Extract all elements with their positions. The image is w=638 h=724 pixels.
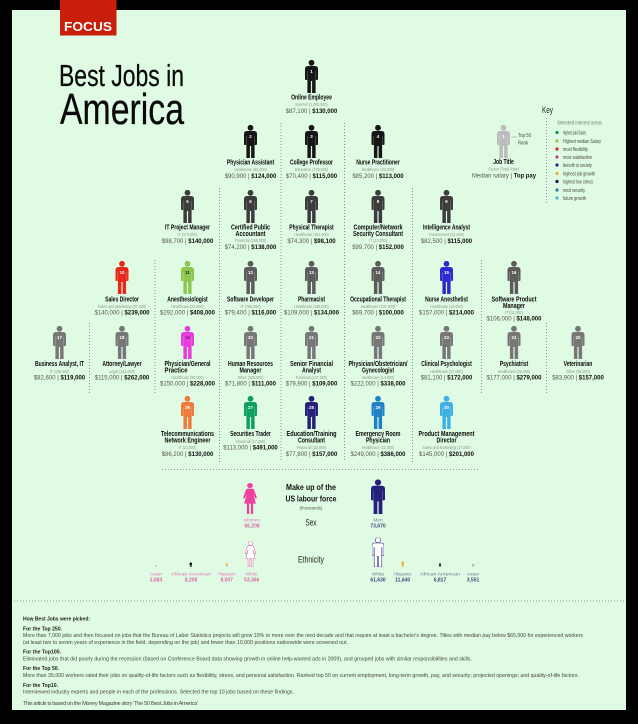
job: Nurse Practitioner xyxy=(352,125,404,180)
job: Securities Trader: 27 xyxy=(248,405,253,410)
job: Occupational Therapist xyxy=(350,261,406,316)
sector: Education (276,000) xyxy=(295,167,329,172)
section tab: FOCUS xyxy=(60,0,116,36)
job: Pharmacist: 13 xyxy=(309,270,314,275)
top 250: More than 7,000 jobs and then focused on jobs that the Bureau of Labor Statistics projects will grow 10% or more over the next decade and that require at least a bachelor's degree. Titles with median pay below $65,000 for experienced workers xyxy=(23,633,583,639)
white women xyxy=(244,541,260,584)
job: Sales Director xyxy=(95,261,150,316)
african american men: African American xyxy=(420,572,460,578)
job title: Securities Trader xyxy=(230,430,271,438)
sector: Healthcare (19,000) xyxy=(430,304,463,309)
key item 1: Highest paid Salary xyxy=(563,130,586,136)
job title: Human Resources xyxy=(228,361,273,368)
job title: Telecommunications xyxy=(161,431,214,438)
salary: $99,700 | $152,000 xyxy=(352,245,404,251)
sector: Other (68,000) xyxy=(566,369,590,374)
sample sector: Sector (Total Jobs) xyxy=(488,166,519,172)
job title: Product Management xyxy=(418,431,475,438)
icon: person rank 4 xyxy=(372,125,384,158)
key item 3: most flexibility xyxy=(563,147,588,153)
sector: IT (13,000) xyxy=(369,238,387,243)
job title: Sales Director xyxy=(105,296,139,304)
job title: Attorney/Lawyer xyxy=(102,360,142,368)
hispanic women: Hispanic xyxy=(217,572,236,578)
sector: Healthcare (22,000) xyxy=(362,445,395,450)
sector: IT (798,000) xyxy=(241,304,261,309)
sector: Healthcare (161,000) xyxy=(294,232,329,237)
icon: person rank 5 xyxy=(181,190,194,223)
salary: $113,000 | $491,000 xyxy=(223,446,278,452)
job title: Software Developer xyxy=(227,296,274,304)
sector: Sales and Marketing (97,000) xyxy=(98,304,147,309)
job title: Consultant xyxy=(298,438,325,444)
job: Attorney/Lawyer: 18 xyxy=(120,335,125,340)
job: Anesthesiologist: 11 xyxy=(185,270,190,275)
job: Telecommunications Network Engineer: 26 xyxy=(185,405,190,410)
women figure xyxy=(243,483,261,530)
job: Software Product Manager: 16 xyxy=(512,270,517,275)
legend: sample job entry: 1 xyxy=(502,134,505,139)
rank label: Rank xyxy=(518,140,528,146)
job: Product Management Director: 30 xyxy=(444,405,449,410)
source note: This article is based on the Money Magazine story 'The 50 Best Jobs in America' xyxy=(23,701,198,707)
hispanic men: Hispanic xyxy=(393,572,412,578)
salary: $86,200 | $130,000 xyxy=(162,452,214,458)
salary: $70,400 | $115,000 xyxy=(286,174,338,180)
job title: Emergency Room xyxy=(356,431,400,438)
sector: Healthcare (90,000) xyxy=(171,375,204,380)
job: Intelligence Analyst: 9 xyxy=(445,199,448,204)
top 100: Eliminated jobs that did poorly during the recession (based on Conference Board data showing growth in online help-wanted ads in 2009), and grouped jobs with similar responsibilities and skills. xyxy=(23,656,472,662)
job title: Computer/Network xyxy=(354,224,403,231)
job title: Anesthesiologist xyxy=(167,296,208,304)
icon: person rank 22 xyxy=(372,326,384,359)
labour force heading: US labour force xyxy=(286,494,337,504)
job title: Online Employee xyxy=(291,94,332,102)
top 250: (at least two to seven years of experience in the field, depending on the job) and fewer than 10,000 positions nationwide were screened out. xyxy=(23,640,348,646)
salary: $81,100 | $172,000 xyxy=(421,376,473,382)
icon: man xyxy=(371,479,385,514)
icon: person rank 29 xyxy=(372,396,384,429)
asian women xyxy=(150,565,162,584)
key xyxy=(542,105,602,202)
salary: $79,400 | $116,000 xyxy=(225,310,277,316)
job: Pharmacist xyxy=(284,261,340,316)
hispanic women: 8,007 xyxy=(220,578,233,584)
african american women: African American xyxy=(171,572,211,578)
job title: Physician xyxy=(366,438,390,444)
job title: Analyst xyxy=(302,368,321,374)
job: College Professor xyxy=(286,125,338,180)
african american men xyxy=(420,563,460,584)
asian men xyxy=(467,564,479,584)
job: Nurse Practitioner: 4 xyxy=(377,134,380,139)
icon: person rank 11 xyxy=(181,261,194,294)
job: Certified Public Accountant: 6 xyxy=(249,199,252,204)
sector: Internet (1,000,000) xyxy=(295,101,328,107)
asian women: 3,084 xyxy=(150,578,162,584)
job title: Physical Therapist xyxy=(289,224,334,232)
sector: Legal (141,000) xyxy=(109,369,135,374)
title: Best Jobs in xyxy=(59,58,184,93)
labour force heading: (thousands) xyxy=(300,506,323,512)
sector: IT (31,000) xyxy=(505,310,523,315)
salary: $115,000 | $262,000 xyxy=(95,376,150,382)
top 50: More than 35,000 workers rated their jobs on quality-of-life factors such as flexibility, stress, and personal satisfaction. Ranked top 50 on current employment, long-term growth, pay, and security; projected openings; and quality-of-life factors. xyxy=(23,673,579,679)
job: Nurse Anesthetist xyxy=(419,261,475,316)
icon: person rank 28 xyxy=(305,396,318,429)
job title: Manager xyxy=(503,303,525,310)
job: IT Project Manager xyxy=(162,190,214,245)
job: Senior Financial Analyst xyxy=(286,326,338,388)
job title: Certified Public xyxy=(231,224,270,231)
job title: Physician/Obstetrician/ xyxy=(348,361,408,368)
salary: $87,100 | $130,000 xyxy=(286,109,338,115)
men figure xyxy=(370,479,386,530)
icon: person rank 1 xyxy=(305,60,318,93)
job: Psychiatrist: 24 xyxy=(512,335,517,340)
job: Human Resources Manager: 20 xyxy=(248,335,253,340)
icon: person rank 25 xyxy=(572,326,584,359)
job: Physical Therapist xyxy=(287,190,336,245)
sector: Healthcare (23,000) xyxy=(171,304,204,309)
salary: $249,000 | $386,000 xyxy=(351,452,406,458)
job: Emergency Room Physician: 29 xyxy=(376,405,381,410)
sex label: Sex xyxy=(306,518,317,528)
job: Clinical Psychologist xyxy=(421,326,473,382)
labour force heading: Make up of the xyxy=(286,482,336,492)
job title: Psychiatrist xyxy=(500,360,528,368)
icon: person rank 9 xyxy=(440,190,453,223)
job: Clinical Psychologist: 23 xyxy=(444,335,449,340)
icon: person rank 2 xyxy=(244,125,257,158)
top 100 xyxy=(23,650,472,662)
sector: IT (174,000) xyxy=(178,232,198,237)
methodology heading: How Best Jobs were picked: xyxy=(23,616,90,622)
sector: Healthcare (28,000) xyxy=(498,369,531,374)
hispanic men xyxy=(393,561,412,584)
african american women: 8,208 xyxy=(185,578,197,584)
job title: Senior Financial xyxy=(290,361,333,368)
title: America xyxy=(60,85,184,134)
sector: Healthcare (107,000) xyxy=(361,304,396,309)
salary: $77,800 | $157,000 xyxy=(286,452,338,458)
women label: Women xyxy=(244,518,261,524)
job title: Business Analyst, IT xyxy=(35,360,84,368)
job: Attorney/Lawyer xyxy=(95,326,150,382)
salary: $145,000 | $201,000 xyxy=(419,452,475,458)
top 100: For the Top100. xyxy=(23,650,61,656)
top 250: For the Top 250. xyxy=(23,626,62,632)
job: Occupational Therapist: 14 xyxy=(376,270,381,275)
icon: person rank 20 xyxy=(244,326,257,359)
salary: $83,900 | $157,000 xyxy=(552,376,604,382)
women ethnicity chart xyxy=(150,541,260,584)
job title: Veterinarian xyxy=(564,360,593,368)
salary: $74,300 | $98,100 xyxy=(287,239,336,245)
job: Veterinarian: 25 xyxy=(576,335,581,340)
icon: person rank 6 xyxy=(244,190,257,223)
salary: $74,200 | $138,000 xyxy=(225,245,277,251)
job title: Physician/General xyxy=(164,361,211,368)
salary: $98,700 | $140,000 xyxy=(162,239,214,245)
key item 9: future growth xyxy=(563,196,586,202)
asian men: 3,551 xyxy=(467,578,479,584)
section tab: FOCUS: FOCUS xyxy=(64,20,112,34)
job title: Accountant xyxy=(236,231,266,238)
job title: Nurse Practitioner xyxy=(356,159,400,167)
job: Telecommunications Network Engineer xyxy=(161,396,214,458)
salary: $222,000 | $338,000 xyxy=(351,382,406,388)
job title: Clinical Psychologist xyxy=(421,360,472,368)
job: Software Developer: 12 xyxy=(248,270,253,275)
icon: person rank 13 xyxy=(305,261,318,294)
job: Physician/Obstetrician/Gynecologist: 22 xyxy=(376,335,381,340)
key item 7: highest low stress xyxy=(563,180,593,186)
icon: person rank 27 xyxy=(244,396,257,429)
white women: White xyxy=(246,572,258,578)
sector: Healthcare (57,000) xyxy=(430,369,463,374)
icon: grey sample person xyxy=(497,125,510,158)
sector: Financial (17,000) xyxy=(236,439,266,444)
job: Business Analyst, IT: 17 xyxy=(57,335,62,340)
sector: Other (226,000) xyxy=(238,375,264,380)
job: Nurse Anesthetist: 15 xyxy=(444,270,449,275)
salary: $79,900 | $109,000 xyxy=(286,382,338,388)
salary: $90,900 | $124,000 xyxy=(225,174,277,180)
job title: IT Project Manager xyxy=(165,224,210,232)
job: Intelligence Analyst xyxy=(421,190,473,245)
icon: person rank 18 xyxy=(116,326,128,359)
sector: Healthcare (198,000) xyxy=(294,304,329,309)
job title: Physician Assistant xyxy=(227,159,274,167)
men label: Men xyxy=(373,518,383,524)
african american men: 6,817 xyxy=(434,578,446,584)
key item 8: most security xyxy=(563,188,585,194)
job: Securities Trader xyxy=(223,396,278,452)
job: Online Employee xyxy=(286,60,338,115)
job: Physician/General Practice xyxy=(160,326,216,388)
job title: College Professor xyxy=(290,159,334,167)
asian men: Asian xyxy=(467,572,479,578)
job: Education/Training Consultant: 28 xyxy=(309,405,314,410)
hispanic women xyxy=(217,562,236,584)
methodology text block xyxy=(23,616,583,707)
job title: Manager xyxy=(240,368,262,374)
job: Anesthesiologist xyxy=(160,261,216,316)
sector: Financial (189,000) xyxy=(235,238,267,243)
african american women xyxy=(171,562,211,584)
sector: Sales and Marketing (17,000) xyxy=(422,445,471,450)
job: Psychiatrist xyxy=(487,326,542,382)
sample salary: Median salary | Top pay xyxy=(472,174,537,180)
sample title: Job Title xyxy=(493,158,514,166)
job: Emergency Room Physician xyxy=(351,396,406,458)
salary: $292,000 | $408,000 xyxy=(160,310,216,316)
labour force heading xyxy=(286,482,337,512)
hispanic men: 11,640 xyxy=(395,578,410,584)
salary: $109,000 | $134,000 xyxy=(284,310,340,316)
salary: $106,000 | $148,000 xyxy=(487,316,542,322)
top 10 xyxy=(23,683,294,696)
job: Software Product Manager xyxy=(487,261,542,322)
icon: person rank 3 xyxy=(305,125,318,158)
job: Physical Therapist: 7 xyxy=(310,199,313,204)
job: Senior Financial Analyst: 21 xyxy=(309,335,314,340)
sector: IT (125,000) xyxy=(50,369,70,374)
white women: 53,366 xyxy=(244,578,260,584)
legend: sample job entry xyxy=(472,125,537,180)
icon: person rank 24 xyxy=(508,326,520,359)
job: Sales Director: 10 xyxy=(120,270,125,275)
icon: person rank 16 xyxy=(508,261,520,294)
key subheading: Selected interest areas xyxy=(557,120,602,126)
job: Computer/Network Security Consultant xyxy=(352,190,404,251)
icon: person rank 21 xyxy=(305,326,318,359)
top 10: For the Top10. xyxy=(23,683,58,689)
job: Product Management Director xyxy=(418,396,475,458)
job: IT Project Manager: 5 xyxy=(186,199,189,204)
icon: person rank 17 xyxy=(53,326,66,359)
key item 2: Highest median Salary xyxy=(563,139,601,145)
women value: 66,208 xyxy=(244,524,260,530)
job title: Gynecologist xyxy=(362,368,394,374)
icon: person rank 14 xyxy=(372,261,384,294)
key item 5: benefit to society xyxy=(563,163,592,169)
icon: person rank 7 xyxy=(305,190,318,223)
icon: person rank 30 xyxy=(440,396,453,429)
white men xyxy=(370,538,386,584)
job: Physician/General Practice: 19 xyxy=(185,335,190,340)
job title: Occupational Therapist xyxy=(350,296,406,304)
job title: Practice xyxy=(164,368,188,374)
job title: Security Consultant xyxy=(353,231,404,238)
white men: 61,630 xyxy=(370,578,386,584)
job title: Nurse Anesthetist xyxy=(425,296,468,304)
men ethnicity chart xyxy=(370,538,479,584)
job: Education/Training Consultant xyxy=(286,396,338,458)
icon: person rank 26 xyxy=(181,396,194,429)
job: Physician/Obstetrician/Gynecologist xyxy=(348,326,408,388)
salary: $71,800 | $111,000 xyxy=(225,382,277,388)
job title: Director xyxy=(436,438,457,444)
icon: woman xyxy=(243,483,257,514)
asian women: Asian xyxy=(150,572,162,578)
job: Veterinarian xyxy=(552,326,604,382)
job title: Network Engineer xyxy=(164,438,211,444)
job title: Education/Training xyxy=(286,431,336,438)
key item 6: highest job growth xyxy=(563,172,595,178)
sector: IT (21,000) xyxy=(179,445,197,450)
top 250 xyxy=(23,626,583,646)
job: Business Analyst, IT xyxy=(34,326,86,382)
job: Online Employee: 1 xyxy=(310,69,313,74)
icon: person rank 12 xyxy=(244,261,257,294)
sector: Healthcare (14,000) xyxy=(362,375,395,380)
title xyxy=(59,58,184,134)
salary: $150,000 | $228,000 xyxy=(160,382,216,388)
salary: $82,500 | $115,000 xyxy=(421,239,473,245)
sector: Healthcare (82,000) xyxy=(234,167,267,172)
salary: $177,000 | $279,000 xyxy=(487,376,542,382)
icon: person rank 8 xyxy=(372,190,384,223)
job title: Software Product xyxy=(492,296,537,303)
job: Software Developer xyxy=(225,261,277,316)
ethnicity label: Ethnicity xyxy=(298,554,324,564)
rank label: Top 50 xyxy=(518,133,531,139)
salary: $140,000 | $239,000 xyxy=(95,310,150,316)
salary: $82,600 | $119,000 xyxy=(34,376,86,382)
job: College Professor: 3 xyxy=(310,134,313,139)
job title: Pharmacist xyxy=(298,296,325,304)
job: Computer/Network Security Consultant: 8 xyxy=(377,199,380,204)
job: Physician Assistant: 2 xyxy=(249,134,252,139)
sector: Financial (23,000) xyxy=(297,445,327,450)
salary: $85,200 | $113,000 xyxy=(352,174,404,180)
salary: $157,000 | $214,000 xyxy=(419,310,475,316)
job: Physician Assistant xyxy=(225,125,277,180)
icon: person rank 19 xyxy=(181,326,194,359)
icon: person rank 10 xyxy=(116,261,128,294)
men value: 73,670 xyxy=(370,524,386,530)
sector: Financial (127,000) xyxy=(296,375,328,380)
top 50: For the Top 50. xyxy=(23,666,59,672)
top 10: Interviewed industry experts and people in each of the professions. Selected the top 10 jobs based on these findings. xyxy=(23,690,294,696)
top 50 xyxy=(23,666,579,679)
white men: White xyxy=(372,572,384,578)
job: Human Resources Manager xyxy=(225,326,277,388)
salary: $69,700 | $100,000 xyxy=(352,310,404,316)
job: Certified Public Accountant xyxy=(225,190,277,251)
icon: person rank 23 xyxy=(440,326,453,359)
sector: Healthcare (23,000) xyxy=(362,167,395,172)
sector: Government (51,000) xyxy=(429,232,464,237)
icon: person rank 15 xyxy=(440,261,453,294)
job title: Intelligence Analyst xyxy=(423,224,470,232)
key item 4: most satisfaction xyxy=(563,155,592,161)
key heading: Key xyxy=(542,105,553,116)
